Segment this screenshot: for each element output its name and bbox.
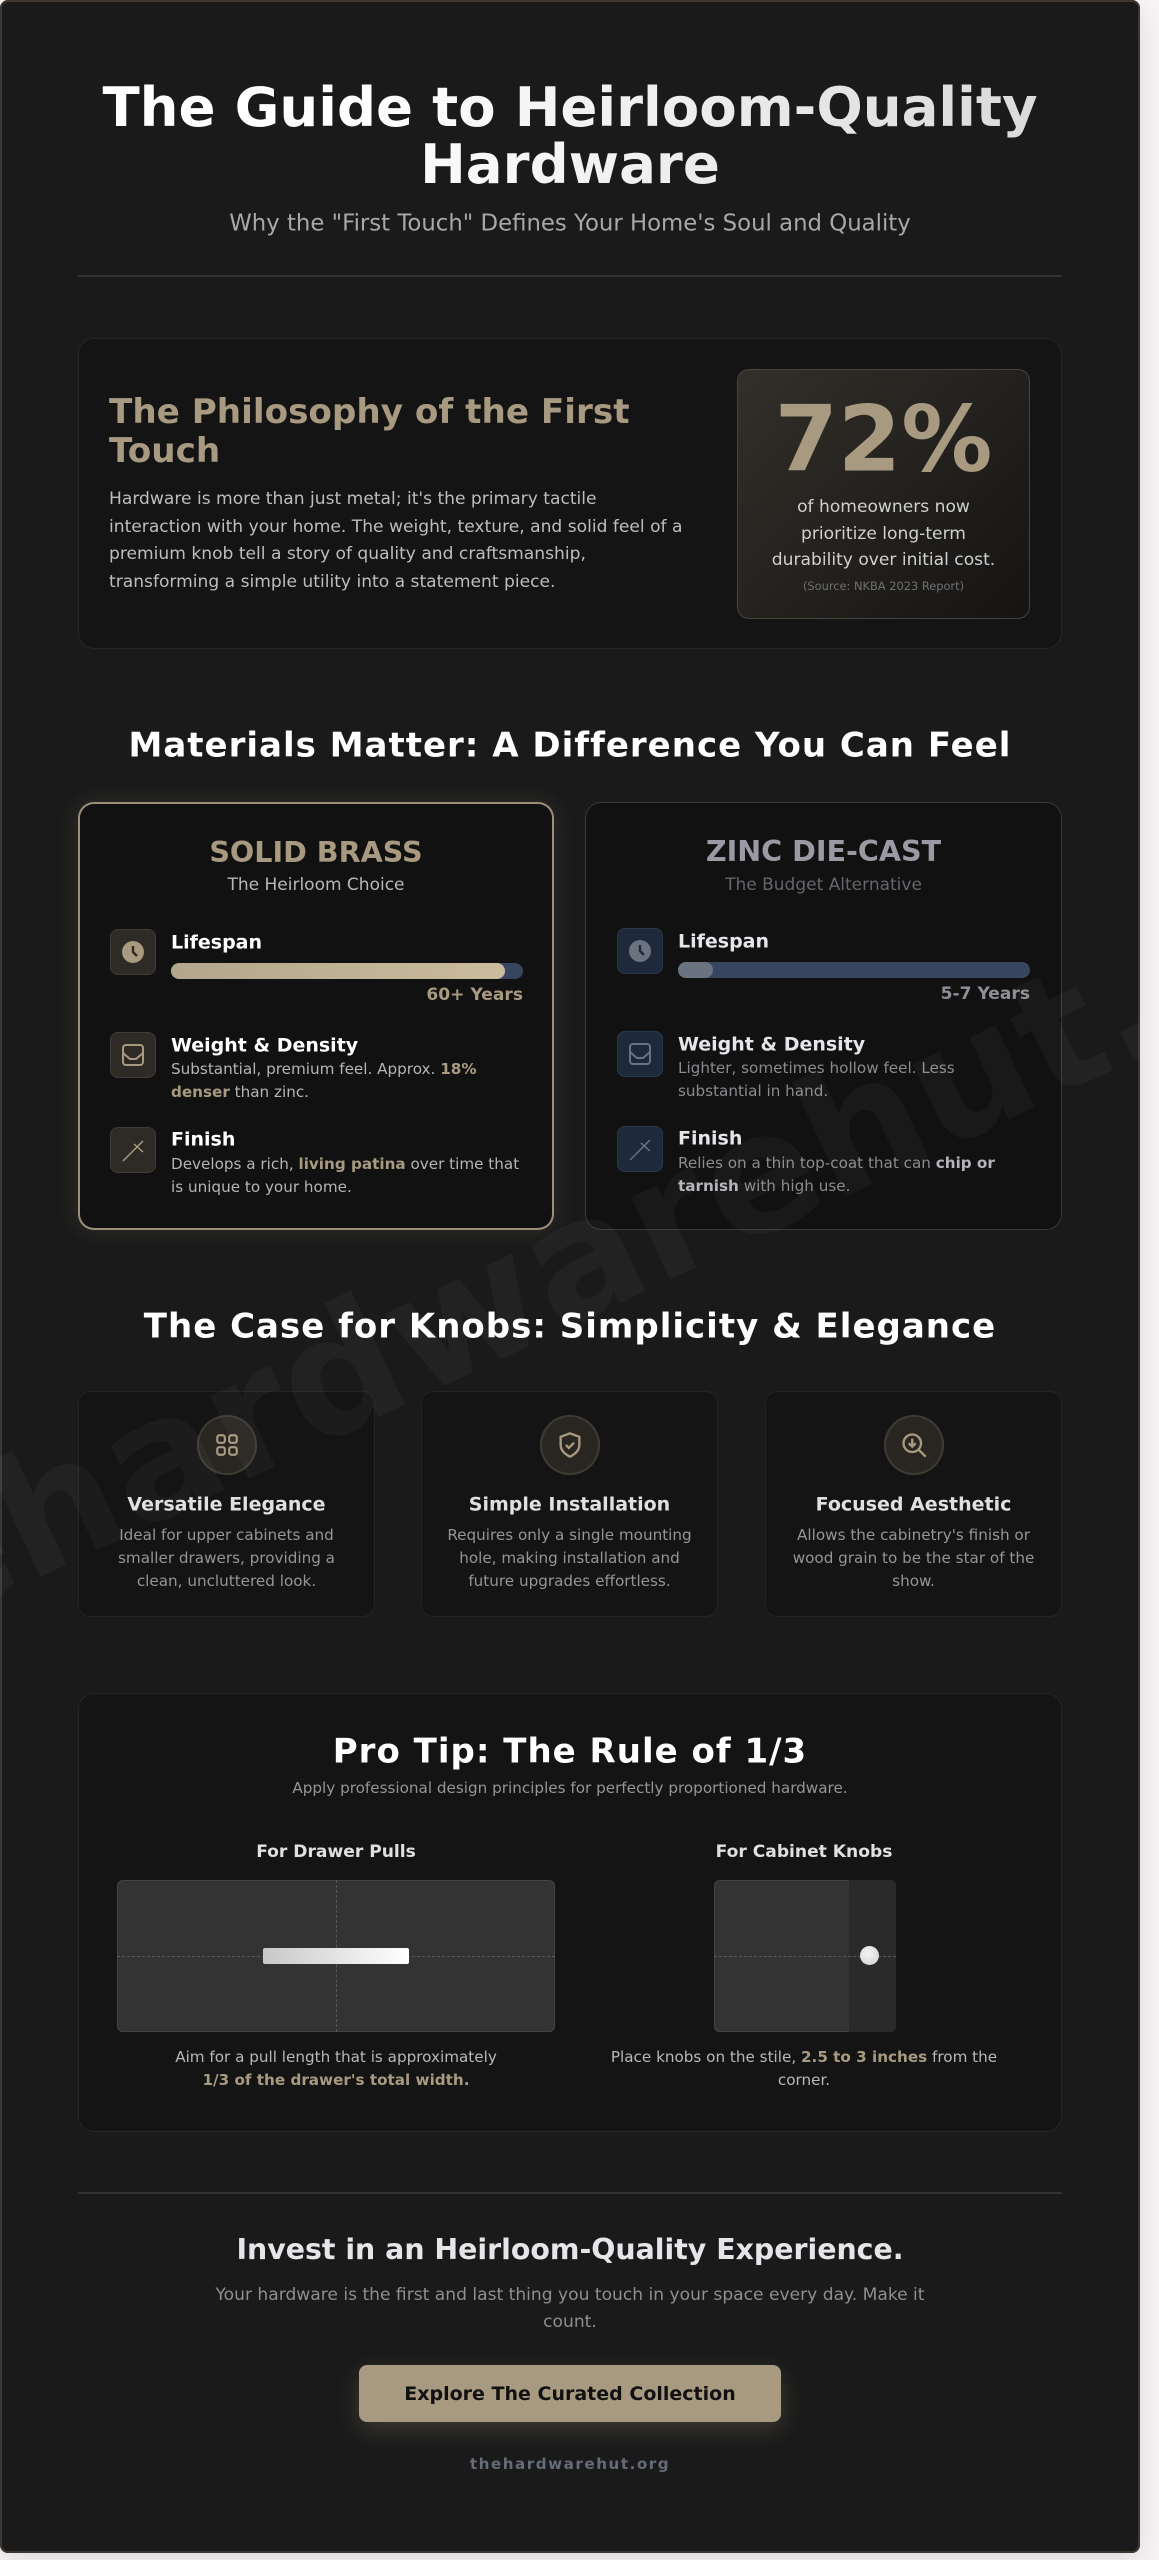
brass finish row	[110, 1127, 519, 1196]
card text: Requires only a single mounting	[447, 1526, 692, 1544]
diagram: cabinet door with knob	[714, 1880, 896, 2032]
description: is unique to your home.	[171, 1178, 352, 1196]
icon: inbox	[617, 1031, 663, 1077]
stat source: (Source: NKBA 2023 Report)	[803, 579, 964, 593]
card text: smaller drawers, providing a	[118, 1549, 335, 1567]
card title: Simple Installation	[469, 1494, 670, 1516]
stat description: durability over initial cost.	[772, 550, 995, 570]
pro tip heading: Pro Tip: The Rule of 1/3	[333, 1732, 807, 1772]
title: The Guide to Heirloom-Quality	[102, 74, 1038, 138]
card text: Allows the cabinetry's finish or	[797, 1526, 1030, 1544]
label: Finish	[678, 1128, 742, 1150]
heading: philosophy	[109, 392, 630, 471]
icon: clock	[110, 929, 156, 975]
card title: Versatile Elegance	[127, 1494, 326, 1516]
icon: grid	[196, 1415, 256, 1475]
label: Weight & Density	[171, 1035, 358, 1057]
icon: wand	[110, 1127, 156, 1173]
cabinet caption: Place knobs on the stile, 2.5 to 3 inches from the	[611, 2048, 997, 2066]
footer url: thehardwarehut.org	[470, 2454, 670, 2472]
brass weight row	[110, 1032, 477, 1101]
philosophy body text: premium knob tell a story of quality and craftsmanship,	[109, 544, 586, 564]
panel: pro tip rule of 1/3	[78, 1693, 1062, 2132]
philosophy body text: interaction with your home. The weight, texture, and solid feel of a	[109, 517, 682, 537]
button: explore collection: Explore The Curated Collection	[404, 2382, 736, 2404]
description: tarnish with high use.	[678, 1177, 850, 1195]
icon: wand	[617, 1126, 663, 1172]
heading: philosophy: Touch	[109, 431, 220, 471]
closing text: count.	[543, 2312, 597, 2332]
cabinet knobs column	[611, 1842, 997, 2089]
heading: philosophy: The Philosophy of the First	[109, 392, 630, 432]
card text: show.	[892, 1572, 935, 1590]
stat description	[772, 497, 995, 570]
lifespan bar	[678, 962, 1030, 978]
card text: wood grain to be the star of the	[793, 1549, 1034, 1567]
lifespan bar	[171, 963, 523, 979]
card: versatile elegance	[78, 1391, 375, 1617]
stat number: 72%	[775, 387, 992, 492]
description: Relies on a thin top-coat that can chip or	[678, 1154, 995, 1172]
drawer heading: For Drawer Pulls	[256, 1842, 416, 1862]
brass subtitle: The Heirloom Choice	[227, 875, 405, 895]
lifespan value: 60+ Years	[426, 985, 523, 1005]
closing text: Your hardware is the first and last thing you touch in your space every day. Make it	[215, 2284, 925, 2304]
panel: zinc die-cast	[585, 802, 1062, 1230]
description: denser than zinc.	[171, 1083, 309, 1101]
philosophy body text: Hardware is more than just metal; it's the primary tactile	[109, 489, 597, 509]
drawer pulls column	[117, 1842, 555, 2089]
description: Develops a rich, living patina over time that	[171, 1155, 519, 1173]
philosophy body text: transforming a simple utility into a statement piece.	[109, 572, 555, 592]
zinc weight row	[617, 1031, 955, 1100]
zinc title: ZINC DIE-CAST	[706, 833, 941, 867]
stat description: of homeowners now	[797, 497, 970, 517]
card title: Focused Aesthetic	[816, 1494, 1011, 1516]
label: Lifespan	[171, 932, 262, 954]
lifespan value: 5-7 Years	[941, 984, 1030, 1004]
description	[171, 1060, 477, 1101]
icon: inbox	[110, 1032, 156, 1078]
card text	[118, 1526, 335, 1590]
philosophy body text	[109, 489, 682, 592]
subtitle: Why the "First Touch" Defines Your Home's Soul and Quality	[229, 210, 911, 236]
drawer caption: 1/3 of the drawer's total width.	[202, 2071, 470, 2089]
description: Substantial, premium feel. Approx. 18%	[171, 1060, 477, 1078]
stat description: prioritize long-term	[801, 524, 966, 544]
zinc lifespan row	[617, 928, 1030, 1004]
knob	[860, 1946, 879, 1965]
label: Finish	[171, 1129, 235, 1151]
title	[0, 78, 1140, 193]
zinc subtitle: The Budget Alternative	[725, 874, 922, 894]
heading: the case for knobs: The Case for Knobs: Simplicity & Elegance	[144, 1307, 996, 1347]
card text	[447, 1526, 692, 1590]
label: Weight & Density	[678, 1034, 865, 1056]
panel: solid brass	[78, 802, 554, 1230]
drawer caption: Aim for a pull length that is approximately	[175, 2048, 497, 2066]
panel: philosophy of the first touch	[78, 338, 1062, 649]
title: Hardware	[420, 132, 720, 196]
zinc finish row	[617, 1126, 995, 1195]
card text: future upgrades effortless.	[468, 1572, 671, 1590]
closing heading: Invest in an Heirloom-Quality Experience.	[236, 2233, 904, 2266]
stat callout: 72%	[737, 369, 1030, 619]
pro tip subtitle: Apply professional design principles for perfectly proportioned hardware.	[292, 1779, 848, 1797]
description: Lighter, sometimes hollow feel. Less	[678, 1059, 955, 1077]
description	[678, 1059, 955, 1100]
description: substantial in hand.	[678, 1082, 828, 1100]
cabinet caption	[611, 2048, 997, 2089]
card text: Ideal for upper cabinets and	[119, 1526, 334, 1544]
brass title: SOLID BRASS	[209, 834, 423, 868]
card text: hole, making installation and	[459, 1549, 680, 1567]
heading: materials matter: Materials Matter: A Difference You Can Feel	[129, 726, 1011, 766]
card text: clean, uncluttered look.	[137, 1572, 316, 1590]
icon: clock	[617, 928, 663, 974]
diagram: drawer with centered pull	[117, 1880, 555, 2032]
description	[678, 1154, 995, 1195]
closing text	[215, 2284, 925, 2332]
card: simple installation	[421, 1391, 718, 1617]
icon: shield check	[540, 1415, 600, 1475]
drawer pull	[263, 1948, 409, 1964]
brass lifespan row	[110, 929, 523, 1005]
label: Lifespan	[678, 931, 769, 953]
drawer caption	[175, 2048, 497, 2089]
card: focused aesthetic	[765, 1391, 1062, 1617]
icon: magnifier	[884, 1415, 944, 1475]
cabinet caption: corner.	[778, 2071, 830, 2089]
cabinet heading: For Cabinet Knobs	[716, 1842, 892, 1862]
description	[171, 1155, 519, 1196]
card text	[793, 1526, 1034, 1590]
button: explore collection	[359, 2365, 781, 2422]
